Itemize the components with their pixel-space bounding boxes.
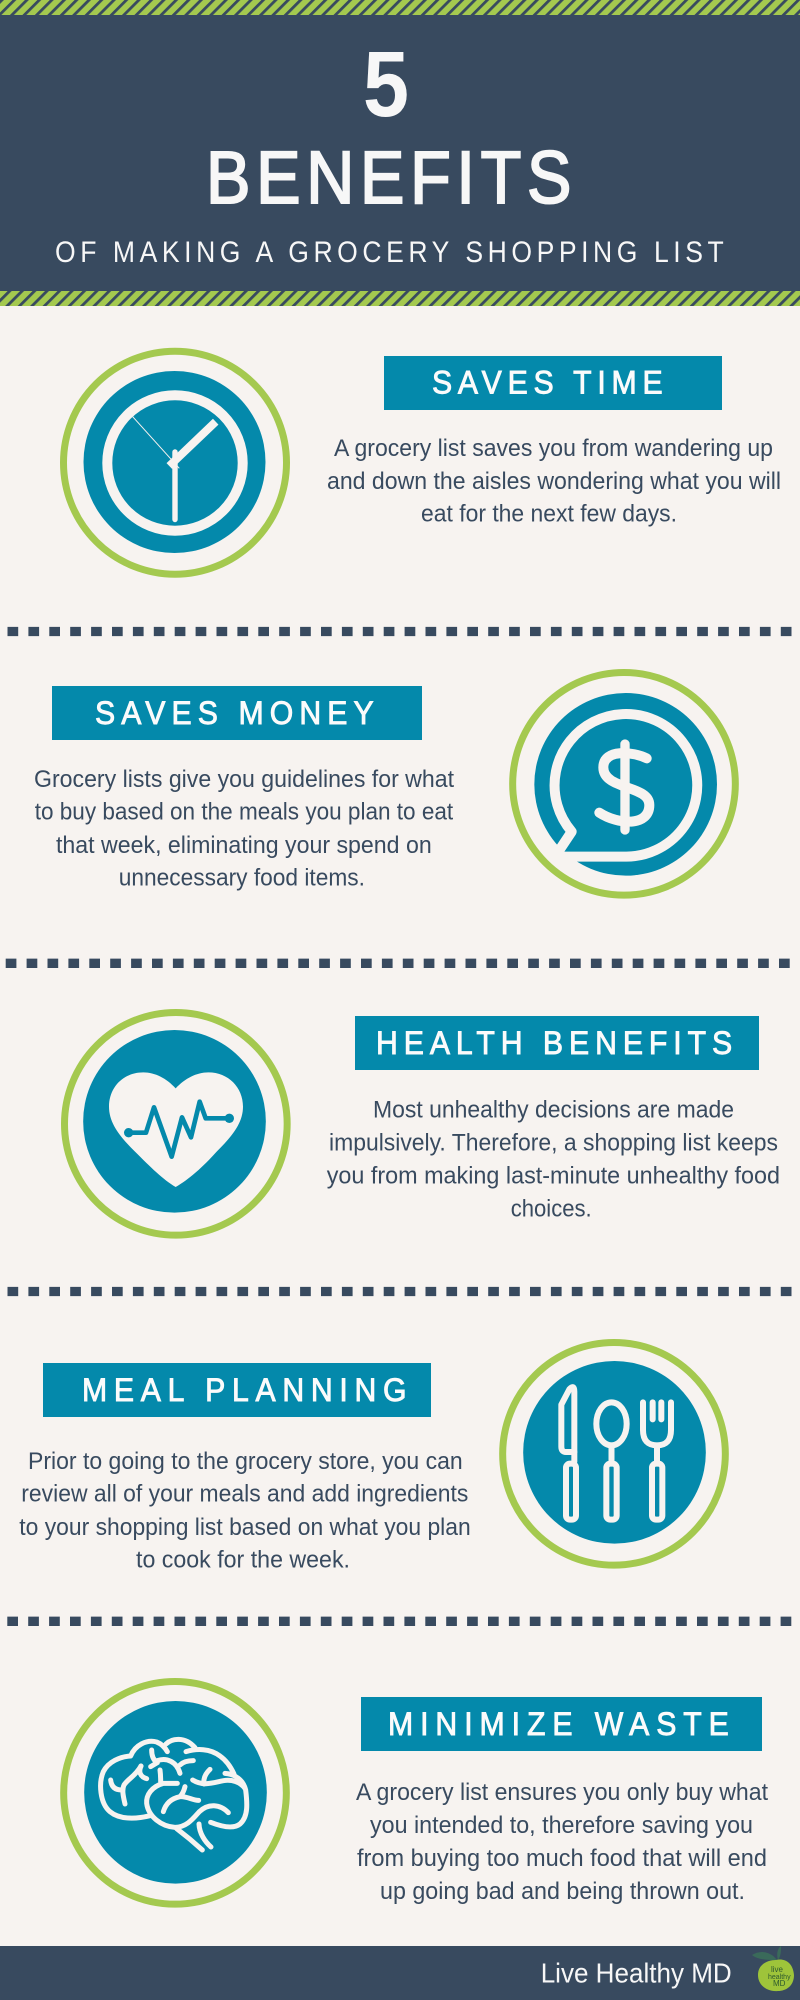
text: minimize waste: up going bad and being thrown out.	[380, 1878, 745, 1905]
text: saves time: and down the aisles wondering what you will	[327, 468, 781, 495]
text: health benefits: Most unhealthy decisions are made	[373, 1097, 734, 1124]
icon: apple logo: MD	[773, 1979, 786, 1988]
panel: health benefits	[64, 1012, 780, 1235]
text: saves money: that week, eliminating your spend on	[56, 832, 432, 859]
heading: meal planning: MEAL PLANNING	[82, 1372, 407, 1408]
text: saves money	[34, 766, 454, 892]
text: meal planning	[19, 1448, 471, 1574]
heading: saves time: SAVES TIME	[432, 365, 663, 401]
text: saves time: eat for the next few days.	[421, 500, 677, 528]
icon: brain	[64, 1681, 286, 1904]
icon: knife spoon fork	[503, 1342, 725, 1565]
header banner	[0, 0, 800, 306]
icon: heart with pulse	[64, 1012, 287, 1235]
text: minimize waste: from buying too much food that will end	[357, 1845, 767, 1872]
text: health benefits	[327, 1097, 780, 1222]
heading: health benefits	[355, 1016, 759, 1070]
text: meal planning: Prior to going to the grocery store, you can	[28, 1448, 463, 1475]
heading: minimize waste	[361, 1697, 762, 1751]
heading: saves money: SAVES MONEY	[95, 695, 374, 731]
text: saves money: to buy based on the meals you plan to eat	[35, 799, 453, 826]
text: saves money: Grocery lists give you guidelines for what	[34, 766, 454, 793]
heading: saves time	[384, 356, 722, 410]
text: meal planning: to cook for the week.	[136, 1547, 350, 1574]
panel: meal planning	[19, 1342, 725, 1574]
text: saves time: A grocery list saves you from wandering up	[334, 435, 773, 462]
icon: apple logo: healthy	[768, 1974, 791, 1981]
text: health benefits: you from making last-minute unhealthy food	[327, 1163, 780, 1190]
text: minimize waste: you intended to, therefore saving you	[370, 1812, 753, 1839]
panel: saves money	[34, 672, 735, 895]
text: minimize waste: A grocery list ensures you only buy what	[356, 1779, 768, 1806]
heading: minimize waste: MINIMIZE WASTE	[388, 1706, 729, 1742]
text: meal planning: to your shopping list based on what you plan	[19, 1514, 471, 1541]
icon: clock	[64, 351, 286, 574]
subtitle: OF MAKING A GROCERY SHOPPING LIST	[55, 236, 724, 268]
title: BENEFITS	[206, 136, 571, 219]
heading: meal planning	[43, 1363, 431, 1417]
footer brand name: Live Healthy MD	[541, 1958, 732, 1989]
icon: apple logo	[752, 1946, 794, 1991]
text: saves money: unnecessary food items.	[119, 865, 365, 892]
text: health benefits: choices.	[511, 1195, 592, 1222]
panel: saves time	[64, 351, 781, 574]
icon: dollar speech bubble	[513, 672, 735, 895]
panel: minimize waste	[64, 1681, 768, 1905]
heading: health benefits: HEALTH BENEFITS	[376, 1025, 732, 1061]
footer bar	[0, 1946, 800, 2000]
heading: saves money	[52, 686, 422, 740]
icon: apple logo: live	[771, 1965, 784, 1974]
text: meal planning: review all of your meals and add ingredients	[21, 1481, 468, 1508]
title number: 5	[363, 32, 409, 136]
text: health benefits: impulsively. Therefore, a shopping list keeps	[329, 1129, 778, 1156]
text: saves time	[327, 435, 781, 528]
text: minimize waste	[356, 1779, 768, 1905]
